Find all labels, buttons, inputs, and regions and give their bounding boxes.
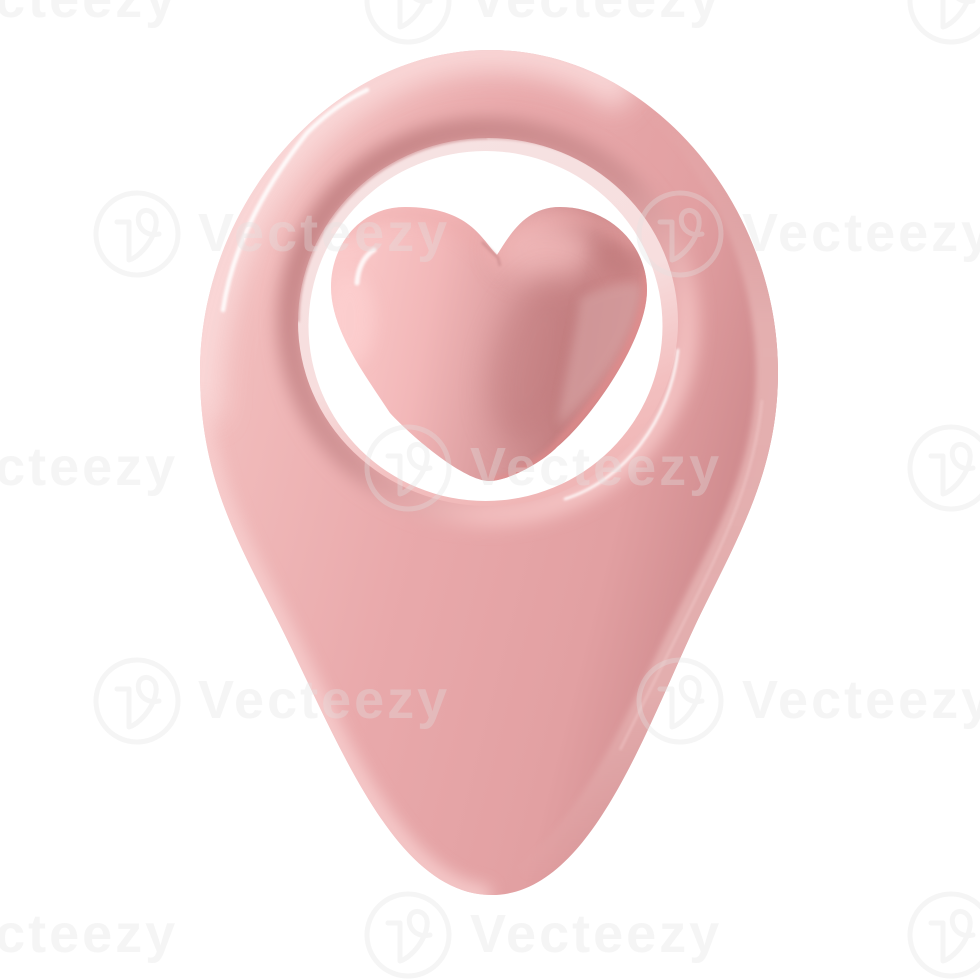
ring around hole: [298, 138, 678, 506]
watermark: Vecteezy repeated logos and words: Vecteezy: [198, 203, 450, 263]
heart notch crease: [482, 242, 500, 266]
heart: [326, 207, 647, 481]
pin body: [200, 50, 778, 897]
heart left bright zone: [347, 303, 366, 353]
left lower edge light: [200, 400, 490, 897]
heart right lobe light: [497, 220, 593, 280]
heart top right dark spot: [610, 253, 631, 270]
outer rim light, top and left: [200, 50, 630, 420]
glossy highlight on left rim: [223, 90, 367, 310]
inner tube shadow around hole: [290, 130, 686, 514]
heart right facet: [558, 284, 642, 425]
heart centre shadow: [484, 274, 564, 437]
heart specular: [357, 250, 374, 283]
heart saturated right edge: [489, 270, 647, 481]
watermark: Vecteezy repeated logos and words: Vecteezy: [470, 904, 722, 964]
watermark: Vecteezy repeated logos and words: Vecteezy: [198, 670, 450, 730]
heart top lobe tint: [349, 207, 635, 252]
right band inner streak: [620, 400, 762, 750]
watermark: Vecteezy repeated logos and words: Vecteezy: [470, 437, 722, 497]
right outer pale band: [581, 194, 778, 816]
